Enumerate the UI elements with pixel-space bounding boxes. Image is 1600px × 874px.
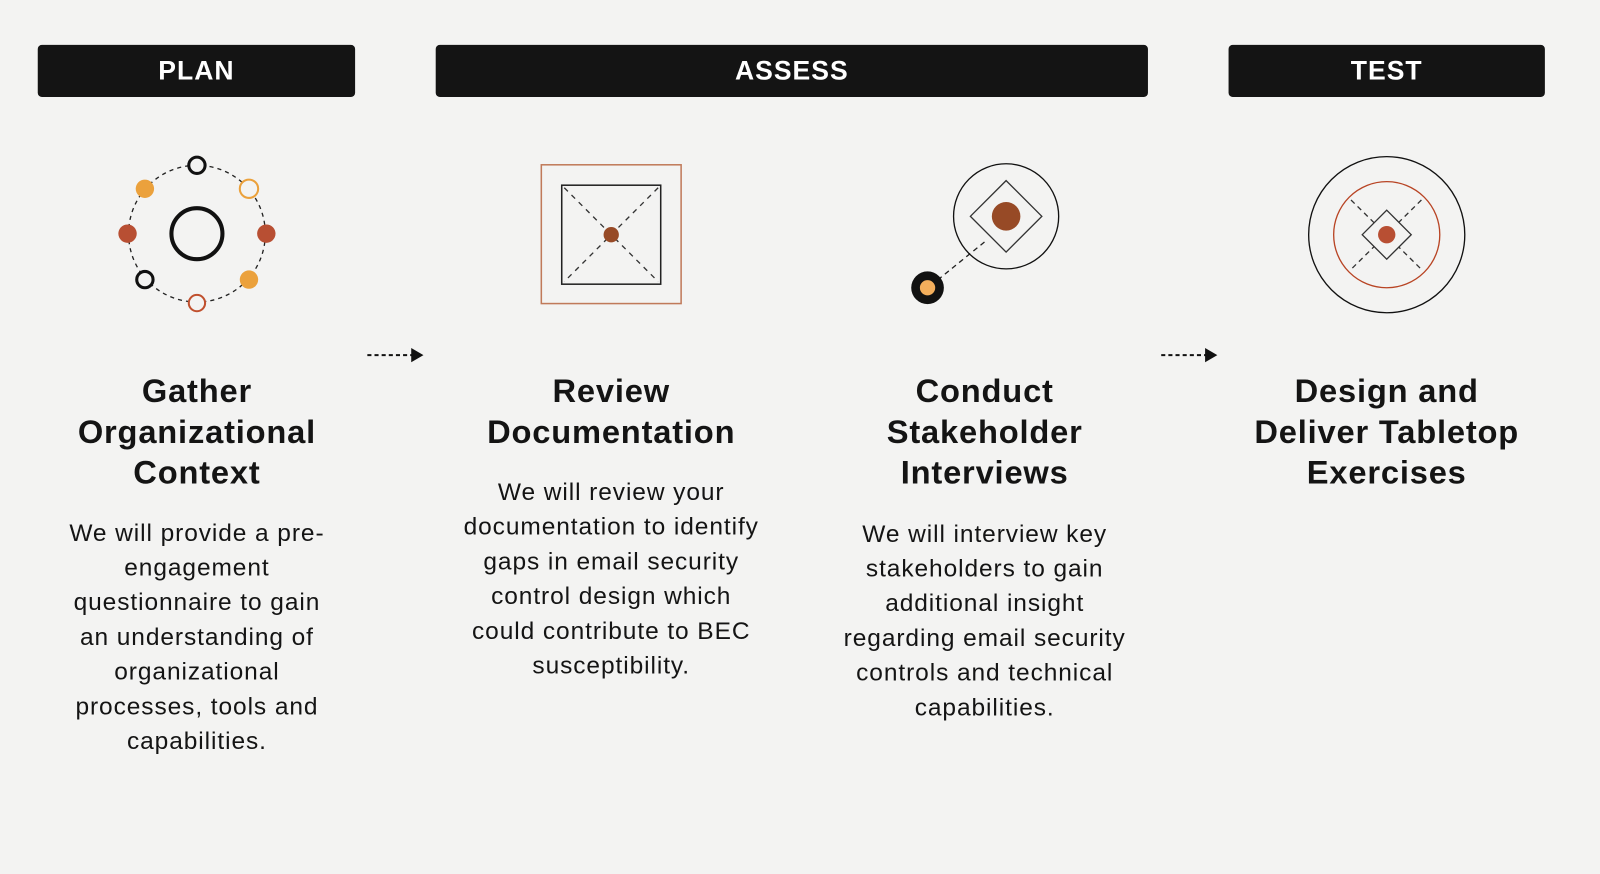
text: gather: an understanding of bbox=[80, 623, 314, 651]
text: interviews: regarding email security bbox=[844, 624, 1126, 652]
text: gather: engagement bbox=[124, 554, 270, 582]
heading: tabletop: Deliver Tabletop bbox=[1254, 413, 1519, 450]
bar: assess: ASSESS bbox=[735, 55, 849, 86]
heading: review: Review bbox=[552, 372, 670, 409]
text: interviews: capabilities. bbox=[915, 694, 1055, 721]
text: review: could contribute to BEC bbox=[472, 617, 750, 645]
text: gather: We will provide a pre- bbox=[69, 519, 325, 547]
text: gather: capabilities. bbox=[127, 728, 267, 755]
heading: gather bbox=[78, 372, 316, 491]
text: gather: organizational bbox=[114, 658, 280, 686]
heading: gather: Organizational bbox=[78, 413, 316, 450]
arrow: assess to test bbox=[1161, 348, 1218, 362]
bar: plan bbox=[38, 45, 355, 97]
bar: test: TEST bbox=[1351, 55, 1423, 86]
heading: interviews: Stakeholder bbox=[887, 413, 1083, 450]
heading: interviews: Interviews bbox=[901, 454, 1069, 491]
heading: tabletop bbox=[1254, 372, 1519, 491]
heading: gather: Gather bbox=[142, 372, 252, 409]
text: interviews: controls and technical bbox=[856, 659, 1113, 687]
text: interviews: stakeholders to gain bbox=[866, 555, 1103, 583]
bar: plan: PLAN bbox=[158, 55, 235, 86]
text: review: control design which bbox=[491, 583, 731, 610]
heading: gather: Context bbox=[133, 454, 261, 491]
heading: review: Documentation bbox=[487, 413, 735, 450]
heading: review bbox=[487, 372, 735, 450]
text: review: susceptibility. bbox=[532, 652, 690, 680]
bar: test bbox=[1229, 45, 1545, 97]
text: review: gaps in email security bbox=[483, 548, 739, 576]
text: gather bbox=[69, 519, 325, 755]
heading: tabletop: Design and bbox=[1295, 372, 1479, 409]
icon: orbit circles bbox=[118, 156, 276, 312]
text: review: documentation to identify bbox=[464, 513, 759, 541]
text: review: We will review your bbox=[498, 479, 724, 506]
text: interviews: additional insight bbox=[885, 590, 1084, 617]
text: gather: questionnaire to gain bbox=[74, 589, 320, 616]
text: gather: processes, tools and bbox=[75, 693, 318, 720]
arrow: plan to assess bbox=[367, 348, 424, 362]
text: interviews: We will interview key bbox=[862, 520, 1107, 548]
icon: document square bbox=[540, 164, 682, 304]
icon: tabletop target bbox=[1308, 156, 1466, 314]
text: review bbox=[464, 479, 759, 680]
heading: interviews: Conduct bbox=[916, 372, 1054, 409]
icon: stakeholder target bbox=[911, 163, 1060, 304]
heading: interviews bbox=[887, 372, 1083, 491]
heading: tabletop: Exercises bbox=[1307, 454, 1467, 491]
text: interviews bbox=[844, 520, 1126, 721]
bar: assess bbox=[436, 45, 1148, 97]
